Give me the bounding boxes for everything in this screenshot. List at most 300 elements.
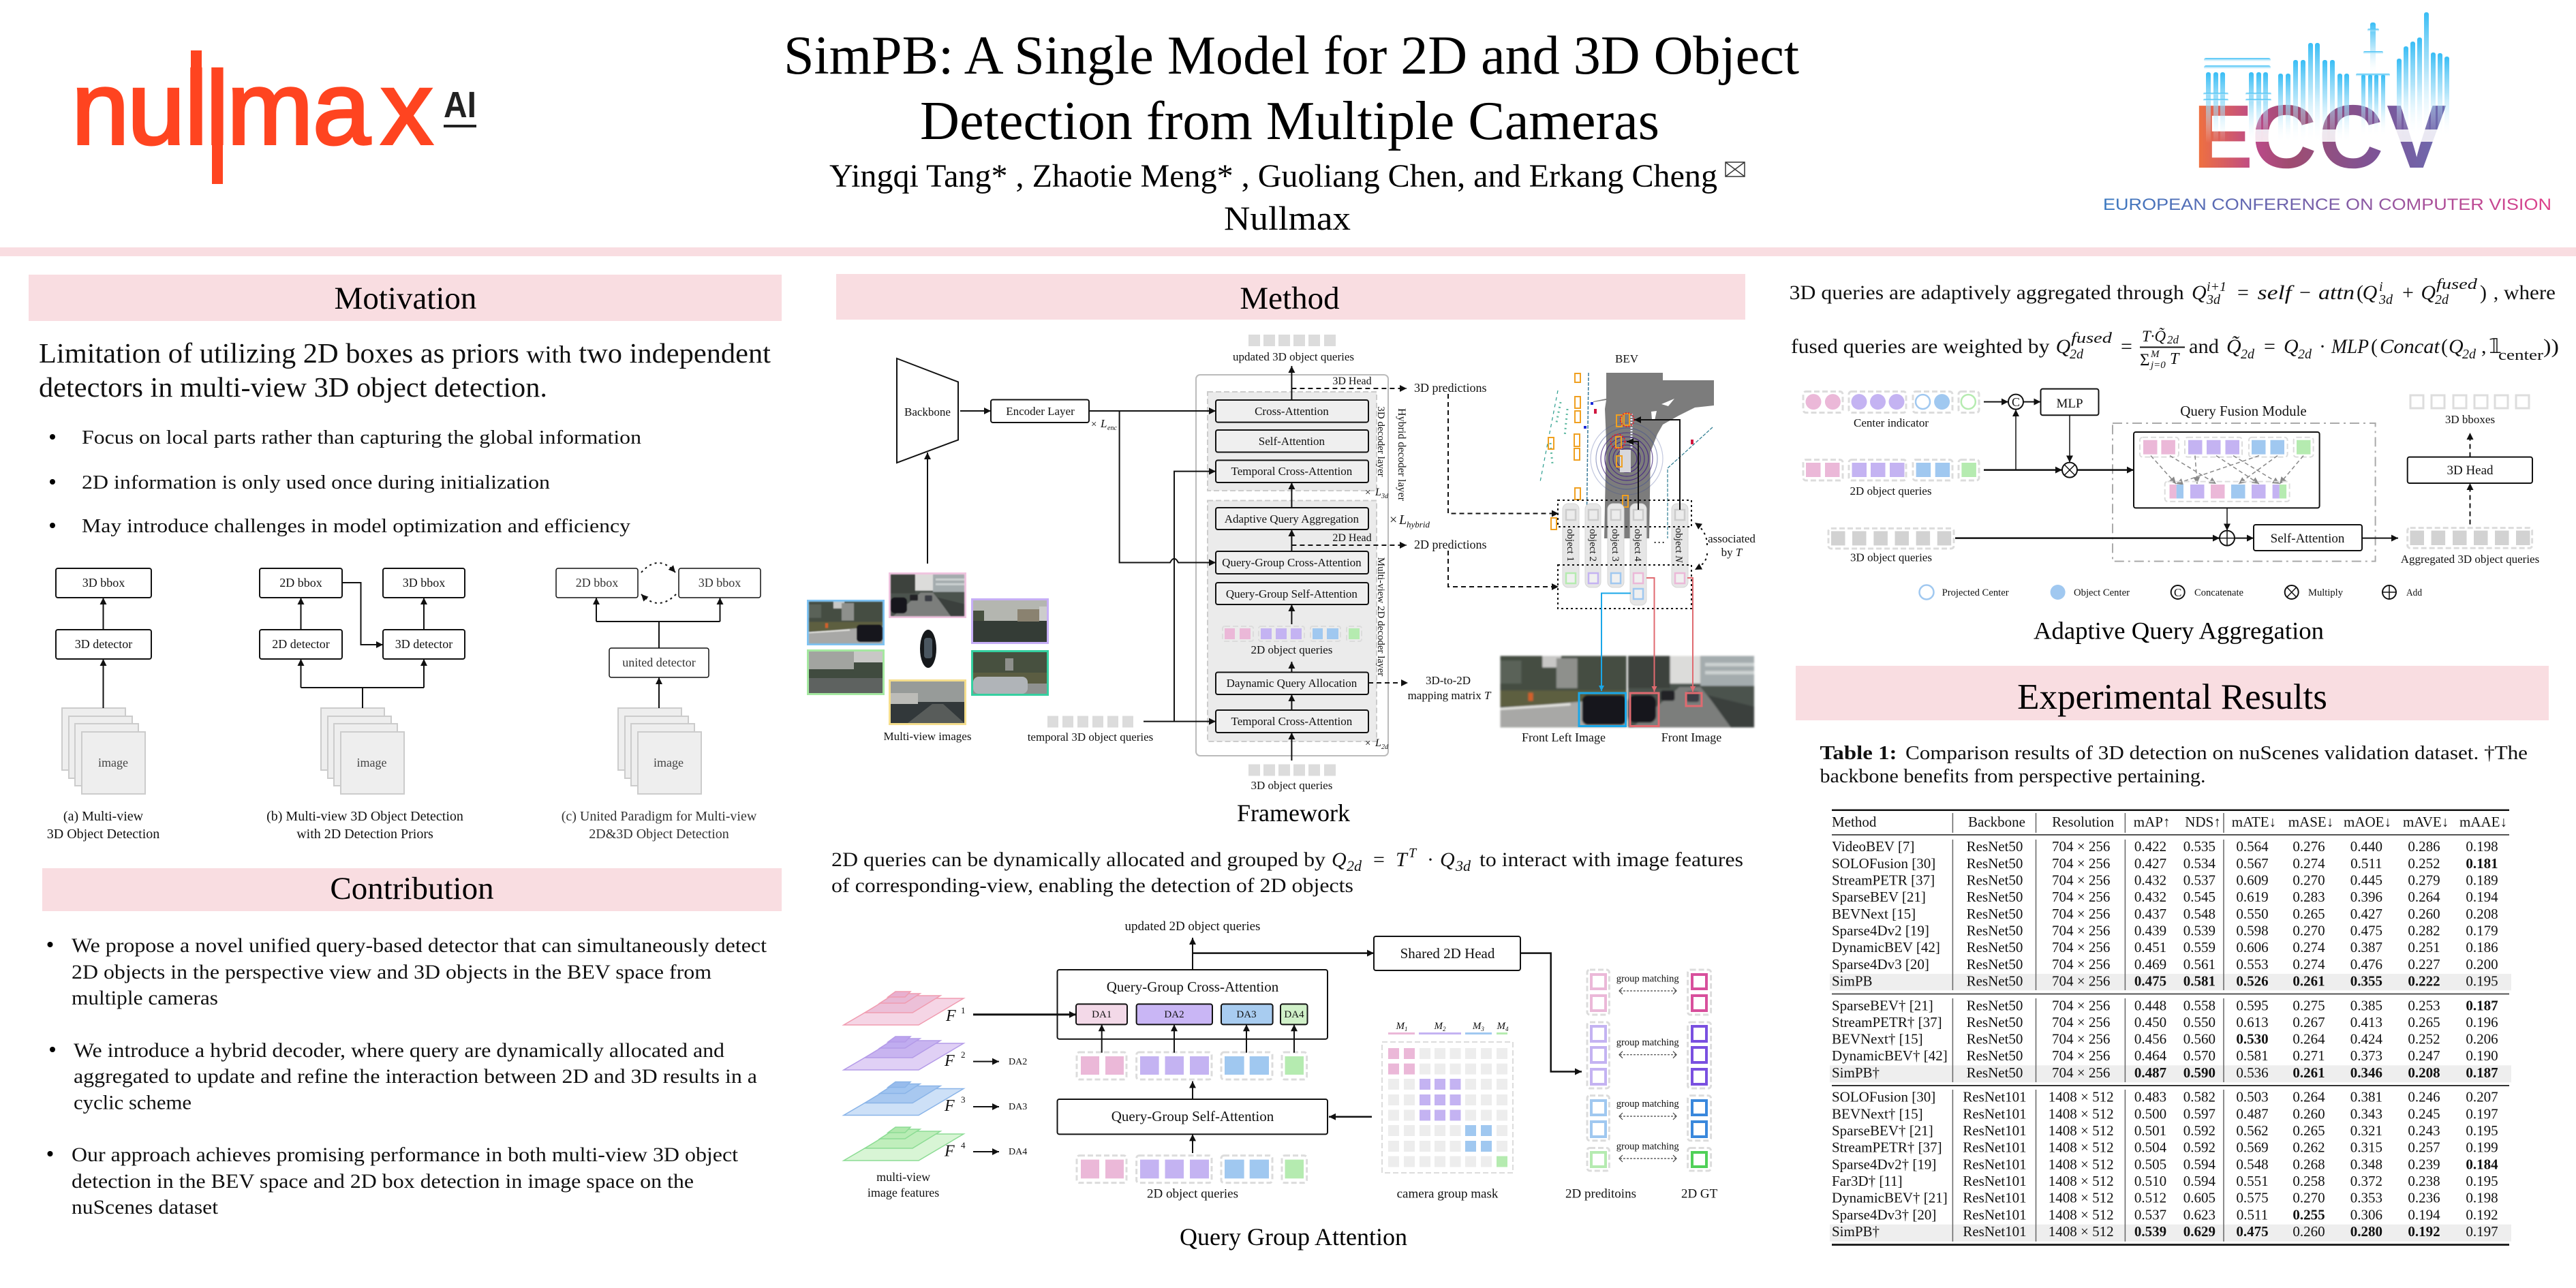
table row: BEVNext dagger: 0.264 [2293, 1031, 2325, 1047]
title: Detection from Multiple Cameras [920, 91, 1659, 151]
table row: Sparse4Dv2: ResNet50 [1967, 923, 2023, 939]
text block: 3D query aggregation formula: + [2402, 281, 2414, 304]
text block: 2D query allocation with formula [831, 846, 1743, 897]
table row: SimPB ResNet101: 0.192 [2408, 1223, 2440, 1240]
table row: SimPB ResNet101: ResNet101 [1963, 1223, 2027, 1240]
diagram: multi-view 3D detection with 2D priors: 2D detector [272, 637, 330, 651]
object query columns [1563, 504, 1688, 605]
table row: SparseBEV: 0.194 [2466, 889, 2498, 905]
table header: mAP↑ [2134, 814, 2170, 830]
table header: mASE↓ [2288, 814, 2333, 830]
table row: StreamPETR ResNet101: StreamPETR† [37] [1832, 1139, 1942, 1156]
query-group cross-attention block: DA3 [1236, 1009, 1257, 1020]
table row: SparseBEV dagger: 0.253 [2408, 998, 2440, 1014]
table row: Sparse4Dv3: 0.469 [2134, 956, 2166, 972]
table row: DynamicBEV: DynamicBEV [42] [1832, 939, 1940, 955]
decoder annotations: Hybrid decoder layer [1396, 408, 1407, 502]
table row: BEVNext dagger: 704 × 256 [2052, 1031, 2110, 1047]
decoder annotations: 2D Head [1332, 532, 1372, 544]
table row: BEVNext ResNet101: ResNet101 [1963, 1105, 2027, 1122]
table row: StreamPETR dagger: ResNet50 [1967, 1014, 2023, 1030]
table row: BEVNext: 0.208 [2466, 906, 2498, 922]
table row: DynamicBEV ResNet101: 0.575 [2236, 1190, 2269, 1206]
heading: method: Method [1240, 281, 1340, 316]
table row: Sparse4Dv2 ResNet101 [1832, 1156, 2498, 1172]
text block: 3D query aggregation formula: 𝟙 [2489, 335, 2502, 358]
object query columns: object 4 [1632, 529, 1643, 562]
table row: SimPB dagger ResNet50: 0.208 [2408, 1064, 2440, 1081]
text block: 2D query allocation with formula: · [1427, 848, 1434, 871]
3D object queries row [1828, 528, 1954, 564]
bullet list: motivation points: Focus on local parts rather than capturing the global information [82, 427, 642, 448]
table row: StreamPETR: ResNet50 [1967, 872, 2023, 889]
table row: SimPB ResNet50: 0.261 [2293, 973, 2325, 990]
legend: Multiply [2308, 587, 2343, 598]
table row: SOLOFusion ResNet101: 1408 × 512 [2049, 1089, 2114, 1105]
image feature pyramids: 4 [961, 1140, 966, 1150]
table row: StreamPETR: 0.537 [2183, 872, 2215, 889]
text block: 2D query allocation with formula: Q [1440, 848, 1455, 871]
legend: C [2174, 586, 2181, 599]
decoder annotations: × [1390, 512, 1397, 527]
flow arrows [927, 366, 1559, 761]
image feature pyramids: image features [868, 1186, 939, 1199]
decoder blocks: Query-Group Cross-Attention [1222, 556, 1362, 569]
table row: SimPB ResNet101: 1408 × 512 [2049, 1223, 2114, 1240]
table row: Sparse4Dv2 ResNet101: 0.348 [2350, 1156, 2382, 1172]
text block: 3D query aggregation formula: MLP [2331, 335, 2369, 358]
title [784, 26, 1799, 151]
table row: SparseBEV ResNet101: 0.195 [2466, 1122, 2498, 1139]
legend: Concatenate [2194, 587, 2243, 598]
multi-view camera images: Multi-view images [884, 730, 971, 743]
table row: SimPB dagger ResNet50: 0.536 [2236, 1064, 2269, 1081]
operators and flow arrows: C [2012, 395, 2020, 409]
table row: Sparse4Dv2: Sparse4Dv2 [19] [1832, 923, 1929, 939]
icon: ego car [920, 630, 936, 668]
table row: Far3D ResNet101: 0.195 [2466, 1173, 2498, 1189]
decoder blocks: Self-Attention [1259, 435, 1325, 448]
text block: 3D query aggregation formula: Q [2449, 335, 2464, 358]
table row: BEVNext dagger: 0.530 [2236, 1031, 2269, 1047]
aggregated 3D object queries: Aggregated 3D object queries [2401, 553, 2539, 566]
table row: Sparse4Dv3 ResNet101: ResNet101 [1963, 1206, 2027, 1223]
table row: Sparse4Dv2 ResNet101: 0.184 [2466, 1156, 2498, 1172]
heading: experimental results: Experimental Results [2017, 677, 2327, 717]
decoder annotations: L [1375, 487, 1381, 498]
logo: ECCV [2103, 12, 2551, 214]
table row: DynamicBEV ResNet101: 0.353 [2350, 1190, 2382, 1206]
text block: 3D query aggregation formula: = [2237, 281, 2249, 304]
table row: DynamicBEV dagger: 0.190 [2466, 1047, 2498, 1064]
table row: StreamPETR dagger: 0.196 [2466, 1014, 2498, 1030]
table row: Sparse4Dv3 ResNet101: 0.537 [2134, 1206, 2166, 1223]
table row: BEVNext: 0.265 [2293, 906, 2325, 922]
table row: StreamPETR dagger: 0.265 [2408, 1014, 2440, 1030]
table row: StreamPETR: 0.279 [2408, 872, 2440, 889]
group matching predictions and ground truth: group matching [1616, 1037, 1679, 1048]
table row: StreamPETR dagger: StreamPETR† [37] [1832, 1014, 1942, 1030]
table row: DynamicBEV: ResNet50 [1967, 939, 2023, 955]
table row: StreamPETR ResNet101: 0.257 [2408, 1139, 2440, 1156]
table row: DynamicBEV dagger: 0.581 [2236, 1047, 2269, 1064]
table row: StreamPETR ResNet101: 0.504 [2134, 1139, 2167, 1156]
table row: SimPB ResNet50 [1832, 973, 2498, 990]
BEV point cloud [1540, 373, 1714, 538]
table row: Far3D ResNet101: 0.258 [2293, 1173, 2325, 1189]
chart: query group attention diagram [844, 919, 1718, 1201]
heading: motivation [29, 275, 782, 321]
table row: BEVNext: 0.427 [2350, 906, 2382, 922]
table row: StreamPETR ResNet101: ResNet101 [1963, 1139, 2027, 1156]
bullet list: motivation points: 2D information is only used once during initialization [82, 472, 551, 493]
image: back left camera [807, 649, 885, 695]
table row: SOLOFusion: 0.181 [2466, 855, 2498, 872]
decoder annotations: 3D-to-2D [1426, 674, 1471, 687]
text block: 3D query aggregation formula: i+1 [2207, 279, 2226, 294]
image feature pyramids [844, 992, 1027, 1199]
diagram: united paradigm: 3D bbox [699, 576, 741, 589]
table row: SparseBEV dagger: 0.275 [2293, 998, 2325, 1014]
diagram: multi-view 3D object detection: 3D Object Detection [47, 827, 159, 842]
table row: SparseBEV ResNet101: 0.592 [2183, 1122, 2215, 1139]
decoder annotations: 3D Head [1332, 375, 1372, 387]
table header: Resolution [2052, 814, 2115, 830]
table row: StreamPETR dagger: 0.550 [2183, 1014, 2215, 1030]
table row: SparseBEV: 0.432 [2134, 889, 2166, 905]
table row: SimPB ResNet101: 0.280 [2350, 1223, 2382, 1240]
table row: StreamPETR ResNet101: 0.262 [2293, 1139, 2325, 1156]
table row: Sparse4Dv3 ResNet101 [1832, 1206, 2498, 1223]
image feature pyramids: DA2 [1009, 1057, 1027, 1067]
title: SimPB: A Single Model for 2D and 3D Object [784, 26, 1799, 86]
table row: StreamPETR: 704 × 256 [2052, 872, 2110, 889]
2D object queries row: 2D object queries [1850, 485, 1931, 497]
table row: StreamPETR ResNet101: 0.199 [2466, 1139, 2498, 1156]
2D object queries: 2D object queries [1251, 643, 1332, 656]
table row: VideoBEV: 0.422 [2134, 838, 2166, 855]
decoder annotations: 2D predictions [1414, 538, 1486, 551]
chart: adaptive query aggregation diagram [1803, 389, 2539, 600]
table row: BEVNext ResNet101: 0.487 [2236, 1105, 2269, 1122]
table row: SOLOFusion ResNet101: 0.207 [2466, 1089, 2498, 1105]
text block: 3D query aggregation formula: fused [2071, 329, 2113, 346]
table row: SparseBEV ResNet101: 0.321 [2350, 1122, 2382, 1139]
text block: 3D query aggregation formula: i [2379, 279, 2383, 294]
decoder annotations: mapping matrix T [1408, 689, 1492, 702]
diagram: multi-view 3D detection with 2D priors: 3D detector [395, 637, 453, 651]
table row: SparseBEV: SparseBEV [21] [1832, 889, 1926, 905]
table header [1832, 814, 2507, 830]
decoder blocks: Daynamic Query Allocation [1227, 677, 1358, 690]
logo: ECCV: ECCV [2193, 87, 2447, 187]
diagram: united paradigm: image [654, 756, 684, 769]
table row: DynamicBEV ResNet101: 0.236 [2408, 1190, 2440, 1206]
table row: StreamPETR ResNet101: 0.569 [2236, 1139, 2269, 1156]
BEV map with object query columns [1501, 352, 1755, 744]
table row: BEVNext dagger: BEVNext† [15] [1832, 1031, 1923, 1047]
heading: experimental results [1796, 666, 2549, 720]
table caption: Table 1: [1820, 742, 1897, 764]
table row: SparseBEV dagger: 0.558 [2183, 998, 2215, 1014]
center indicator row: Center indicator [1854, 416, 1929, 429]
highlighted rows [1830, 974, 2511, 1242]
object query columns: object 1 [1565, 529, 1576, 562]
text block: 3D query aggregation formula: Q [2363, 281, 2378, 304]
diagram: multi-view 3D object detection: image [98, 756, 128, 769]
image feature pyramids: F [944, 1052, 955, 1070]
table row: SOLOFusion: SOLOFusion [30] [1832, 855, 1935, 872]
panel: contribution [42, 868, 782, 1218]
image feature pyramids: multi-view [876, 1170, 930, 1184]
table row: SimPB ResNet101: SimPB† [1832, 1223, 1880, 1240]
table row: SimPB dagger ResNet50: 704 × 256 [2052, 1064, 2110, 1081]
association arrow and label: by T [1721, 546, 1743, 559]
text block: 3D query aggregation formula: 2d [2435, 292, 2449, 307]
panel: method [807, 274, 2559, 1251]
table header: Backbone [1968, 814, 2025, 830]
association arrow and label: associated [1708, 532, 1755, 545]
table row: DynamicBEV dagger: 0.247 [2408, 1047, 2440, 1064]
table row: SparseBEV dagger [1832, 998, 2498, 1014]
group matching predictions and ground truth [1565, 970, 1718, 1201]
table header: NDS↑ [2185, 814, 2221, 830]
multi-view camera images [807, 572, 1049, 743]
decoder blocks: Query-Group Self-Attention [1226, 587, 1358, 600]
decoder annotations: 3D decoder layer [1375, 406, 1386, 477]
table row: BEVNext dagger: 0.252 [2408, 1031, 2440, 1047]
bullet: hybrid decoder [50, 1039, 757, 1114]
heading: contribution: Contribution [330, 871, 494, 906]
group matching predictions and ground truth: group matching [1616, 1099, 1679, 1109]
table row: SimPB ResNet50: 0.581 [2183, 973, 2215, 990]
camera group mask: 2 [1443, 1026, 1446, 1032]
table row: SOLOFusion: 0.567 [2236, 855, 2269, 872]
table row: BEVNext: BEVNext [15] [1832, 906, 1916, 922]
table row: Sparse4Dv3 ResNet101: 0.306 [2350, 1206, 2382, 1223]
table row: Sparse4Dv3 ResNet101: 1408 × 512 [2049, 1206, 2114, 1223]
table row: SparseBEV ResNet101 [1832, 1122, 2498, 1139]
table row: Sparse4Dv3: 0.227 [2408, 956, 2440, 972]
table row: Sparse4Dv3 [1832, 956, 2498, 972]
table row: SimPB ResNet50: 0.222 [2408, 973, 2440, 990]
temporal 3D object queries: temporal 3D object queries [1028, 731, 1153, 743]
table row: Sparse4Dv3: 0.274 [2293, 956, 2325, 972]
text block: 3D query aggregation formula [1790, 275, 2559, 371]
text block: 3D query aggregation formula: ( [2371, 335, 2378, 358]
3D object queries [1248, 765, 1336, 792]
table row: DynamicBEV: 0.559 [2183, 939, 2215, 955]
shared 2D head [1374, 936, 1520, 970]
table row: Sparse4Dv2: 0.282 [2408, 923, 2440, 939]
table row: SOLOFusion ResNet101 [1832, 1089, 2498, 1105]
table row: Sparse4Dv3: 0.200 [2466, 956, 2498, 972]
table row: Sparse4Dv2 ResNet101: Sparse4Dv2† [19] [1832, 1156, 1936, 1172]
table header: mAAE↓ [2459, 814, 2507, 830]
table row: Sparse4Dv2 ResNet101: 1408 × 512 [2049, 1156, 2114, 1172]
diagram: united paradigm: united detector [622, 656, 696, 669]
bottom 2D query row: 2D object queries [1147, 1187, 1238, 1201]
table row: Sparse4Dv2: 0.539 [2183, 923, 2215, 939]
text block: 3D query aggregation formula: 2d [2167, 333, 2179, 346]
table row: SimPB ResNet50: 704 × 256 [2052, 973, 2110, 990]
table row: DynamicBEV ResNet101: ResNet101 [1963, 1190, 2027, 1206]
table row: BEVNext: 704 × 256 [2052, 906, 2110, 922]
table row: Sparse4Dv2: 0.439 [2134, 923, 2166, 939]
table row: SimPB dagger ResNet50: 0.590 [2183, 1064, 2215, 1081]
object query columns: object 3 [1610, 529, 1621, 562]
decoder annotations: 3D predictions [1414, 381, 1486, 395]
text block: 2D query allocation with formula: T [1396, 848, 1409, 871]
chart: framework diagram [807, 335, 1755, 827]
table row: SparseBEV dagger: SparseBEV† [21] [1832, 998, 1933, 1014]
text block: 3D query aggregation formula: M [2150, 349, 2160, 360]
decoder annotations: hybrid [1407, 519, 1430, 530]
text block: 3D query aggregation formula: Concat [2380, 335, 2440, 358]
table row: VideoBEV: 704 × 256 [2052, 838, 2110, 855]
text block: 3D query aggregation formula: = [2121, 335, 2132, 358]
table row: VideoBEV: 0.198 [2466, 838, 2498, 855]
query-group self-attention block: Query-Group Self-Attention [1111, 1108, 1274, 1124]
MLP block [2040, 389, 2099, 415]
table row: BEVNext dagger: ResNet50 [1967, 1031, 2023, 1047]
table row: Sparse4Dv3 ResNet101: 0.623 [2183, 1206, 2215, 1223]
text block: 3D query aggregation formula: 2d [2070, 347, 2084, 362]
table row: SparseBEV: 0.619 [2236, 889, 2269, 905]
table row: DynamicBEV: 0.451 [2134, 939, 2166, 955]
decoder blocks [1216, 400, 1368, 733]
front camera images [1501, 578, 1754, 744]
image feature pyramids: F [945, 1007, 956, 1025]
table row: DynamicBEV: 0.251 [2408, 939, 2440, 955]
table row: DynamicBEV dagger [1832, 1047, 2498, 1064]
text block: 3D query aggregation formula: Q [2421, 281, 2436, 304]
decoder annotations: L [1398, 512, 1407, 527]
table row: VideoBEV: 0.276 [2293, 838, 2325, 855]
diagram: multi-view 3D object detection [47, 568, 159, 842]
table row: DynamicBEV dagger: DynamicBEV† [42] [1832, 1047, 1948, 1064]
text block: limitation statement: detectors in multi-view 3D object detection. [39, 371, 547, 403]
table row: BEVNext ResNet101: 0.597 [2183, 1105, 2215, 1122]
3D object queries: 3D object queries [1251, 779, 1332, 792]
query-group cross-attention block [1058, 970, 1328, 1039]
object query columns: ··· [1653, 536, 1666, 549]
table row: SOLOFusion: 704 × 256 [2052, 855, 2110, 872]
table row: SimPB ResNet101: 0.197 [2466, 1223, 2498, 1240]
aggregated 3D object queries [2401, 528, 2539, 566]
3D head: 3D Head [2447, 463, 2494, 478]
query fusion module [2113, 403, 2376, 562]
table row: SimPB dagger ResNet50 [1832, 1064, 2498, 1081]
table row: SOLOFusion ResNet101: 0.246 [2408, 1089, 2440, 1105]
query fusion module: Self-Attention [2271, 532, 2345, 546]
table row: DynamicBEV ResNet101: 0.605 [2183, 1190, 2215, 1206]
table row: StreamPETR: 0.609 [2236, 872, 2269, 889]
backbone: Backbone [904, 405, 951, 418]
diagram: multi-view 3D detection with 2D priors: image [357, 756, 386, 769]
text block: 3D query aggregation formula: ) [2480, 281, 2487, 304]
table row: Sparse4Dv2 ResNet101: 0.505 [2134, 1156, 2166, 1172]
front camera images: Front Left Image [1522, 731, 1606, 744]
table row: SimPB dagger ResNet50: 0.261 [2293, 1064, 2325, 1081]
camera group mask: M [1473, 1021, 1481, 1032]
text block: 3D query aggregation formula: , [2494, 281, 2498, 304]
table row: DynamicBEV ResNet101: 1408 × 512 [2049, 1190, 2114, 1206]
table row: BEVNext: 0.260 [2408, 906, 2440, 922]
bullet: unified detector: We propose a novel unified query-based detector that can simultaneously detect [72, 934, 767, 957]
table row: VideoBEV: 0.564 [2236, 838, 2269, 855]
table row: Sparse4Dv3 ResNet101: 0.511 [2237, 1206, 2268, 1223]
caption: framework: Framework [1237, 799, 1350, 827]
table row: BEVNext dagger: 0.206 [2466, 1031, 2498, 1047]
table row: SimPB ResNet50: 0.526 [2236, 973, 2269, 990]
table row: BEVNext: 0.550 [2236, 906, 2269, 922]
diagram: united paradigm: (c) United Paradigm for Multi-view [562, 809, 757, 824]
decoder annotations: × [1365, 487, 1370, 498]
query-group cross-attention block: Query-Group Cross-Attention [1107, 979, 1279, 995]
text block: 3D query aggregation formula: Q̃ [2226, 335, 2241, 358]
table row: Sparse4Dv3: 704 × 256 [2052, 956, 2110, 972]
attention arrows [973, 938, 1582, 1153]
image: front camera [889, 572, 966, 618]
table header: Method [1832, 814, 1877, 830]
table row: DynamicBEV ResNet101: 0.198 [2466, 1190, 2498, 1206]
table row: SOLOFusion: 0.274 [2293, 855, 2325, 872]
text block: 3D query aggregation formula: · [2319, 335, 2326, 358]
bullet: hybrid decoder: We introduce a hybrid decoder, where query are dynamically allocated and [74, 1039, 724, 1062]
table row: SOLOFusion ResNet101: 0.483 [2134, 1089, 2166, 1105]
text block: 3D query aggregation formula: j=0 [2149, 360, 2166, 371]
3D object queries row: 3D object queries [1850, 551, 1932, 564]
table row: BEVNext dagger [1832, 1031, 2498, 1047]
encoder layer: × [1091, 419, 1097, 430]
image feature pyramids: DA4 [1009, 1147, 1027, 1157]
text block: 3D query aggregation formula: and [2189, 335, 2219, 358]
table row: Far3D ResNet101: 1408 × 512 [2049, 1173, 2114, 1189]
table row: Sparse4Dv2 ResNet101: 0.594 [2183, 1156, 2216, 1172]
bullet: promising performance: nuScenes dataset [72, 1196, 219, 1218]
image feature pyramids: DA3 [1009, 1102, 1027, 1112]
table row: SimPB ResNet101: 0.629 [2183, 1223, 2215, 1240]
text block: 3D query aggregation formula: 3d [2206, 292, 2221, 307]
table row: VideoBEV [1832, 838, 2498, 855]
bullet: unified detector: multiple cameras [72, 987, 218, 1009]
image feature pyramids: 2 [961, 1049, 965, 1060]
table row: DynamicBEV ResNet101: 0.270 [2293, 1190, 2325, 1206]
diagram: multi-view 3D object detection: (a) Multi-view [63, 809, 144, 824]
text block: 2D query allocation with formula: Q [1332, 848, 1347, 871]
table row: SparseBEV dagger: 0.595 [2236, 998, 2269, 1014]
encoder layer: Encoder Layer [1006, 405, 1075, 418]
diagram: multi-view 3D detection with 2D priors: 2D bbox [279, 576, 322, 589]
text block: 2D query allocation with formula: to interact with image features [1479, 848, 1743, 871]
table row: StreamPETR: 0.270 [2293, 872, 2325, 889]
text block: 2D query allocation with formula: 2d [1347, 857, 1362, 874]
table row: StreamPETR: 0.432 [2134, 872, 2166, 889]
bullet list: motivation points: May introduce challenges in model optimization and efficiency [82, 515, 631, 537]
image feature pyramids: 1 [961, 1005, 965, 1015]
image: front left camera [807, 600, 885, 645]
group matching predictions and ground truth: group matching [1616, 973, 1679, 984]
table row: Far3D ResNet101 [1832, 1173, 2498, 1189]
table row: BEVNext ResNet101: 0.500 [2134, 1105, 2166, 1122]
table row: SimPB dagger ResNet50: 0.187 [2466, 1064, 2498, 1081]
image feature pyramids: F [944, 1142, 955, 1160]
table row: SOLOFusion ResNet101: 0.264 [2293, 1089, 2325, 1105]
text block: 3D query aggregation formula: , [2481, 335, 2486, 358]
text block: 3D query aggregation formula: Q [2056, 335, 2071, 358]
diagram: united paradigm: 2D bbox [576, 576, 618, 589]
